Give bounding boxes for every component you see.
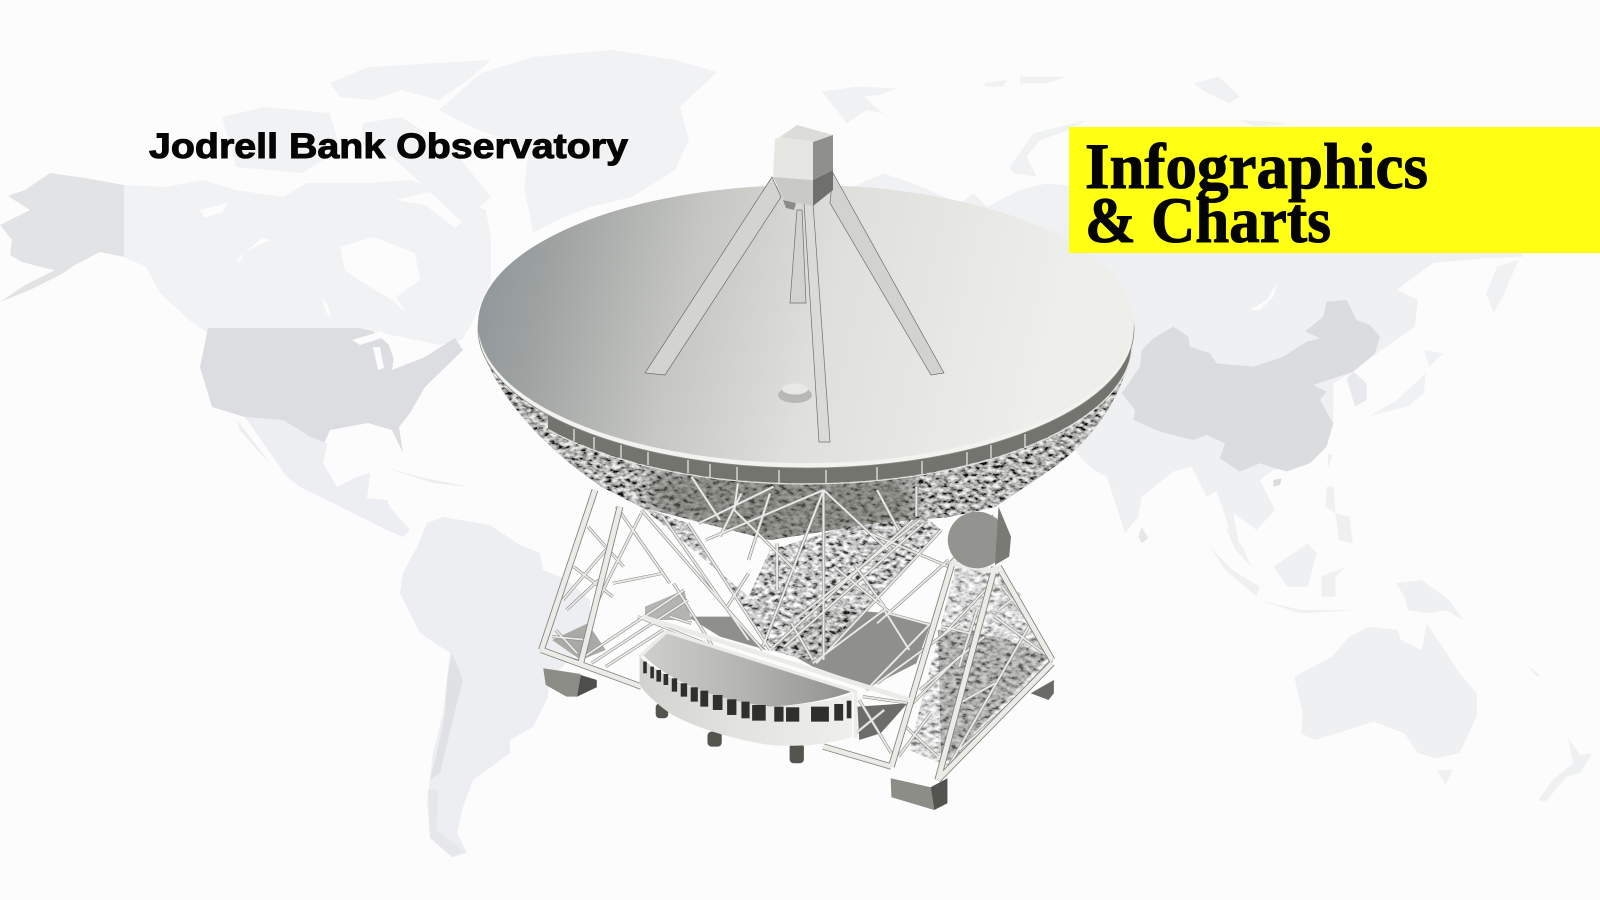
map: South America <box>400 517 590 857</box>
foot blocks <box>543 668 1054 810</box>
map: Chile <box>430 653 463 780</box>
dish surface <box>478 185 1134 463</box>
map: Mexico and Central America <box>237 417 470 537</box>
radio telescope <box>470 125 1140 810</box>
banner line 2: & Charts <box>1085 185 1331 257</box>
map: USA <box>200 328 463 453</box>
map: Oceania and maritime Asia <box>1210 487 1592 802</box>
map: Korea <box>1347 372 1367 407</box>
bowl underside truss texture <box>642 507 1049 766</box>
dish rim panel band <box>548 344 1132 485</box>
map: Patagonia islands <box>428 790 465 857</box>
building roof <box>641 632 856 707</box>
map: Hainan <box>1273 478 1282 487</box>
control building <box>640 632 856 763</box>
map: Great Lakes <box>352 331 432 370</box>
left support leg <box>645 177 781 375</box>
yellow banner <box>1069 127 1600 253</box>
right support leg <box>830 173 944 375</box>
telescope rear platform deck <box>552 590 1049 767</box>
map: Canada and Arctic <box>124 50 717 345</box>
feed cabin <box>773 125 833 210</box>
map: Sri Lanka <box>1138 527 1148 543</box>
map: Russian Arctic islands <box>1194 77 1519 417</box>
feed support legs <box>645 173 944 442</box>
azimuth bearing <box>948 507 1011 568</box>
lattice struts <box>541 477 1052 780</box>
map: China <box>1122 300 1380 472</box>
map: Asia <box>1050 230 1522 550</box>
bowl lattice <box>487 336 1134 540</box>
map: Europe and Russia north <box>822 77 1087 283</box>
front support leg <box>804 203 830 442</box>
tower legs <box>541 490 1052 780</box>
map: Hudson Bay and lakes <box>200 192 462 318</box>
banner line 1: Infographics <box>1085 131 1428 203</box>
badge: Infographics & Charts <box>1069 127 1600 257</box>
rear support leg <box>790 210 806 303</box>
building windows <box>643 662 851 722</box>
map: Taiwan <box>1328 453 1333 468</box>
building wall <box>640 657 852 746</box>
map: Lake Baikal <box>1250 283 1277 310</box>
dish rim <box>478 190 1134 468</box>
map: Alaska <box>0 173 124 302</box>
building roof edge <box>640 632 856 738</box>
title: Jodrell Bank Observatory <box>149 127 629 166</box>
building support pillars <box>656 703 804 763</box>
central hub <box>778 384 812 403</box>
